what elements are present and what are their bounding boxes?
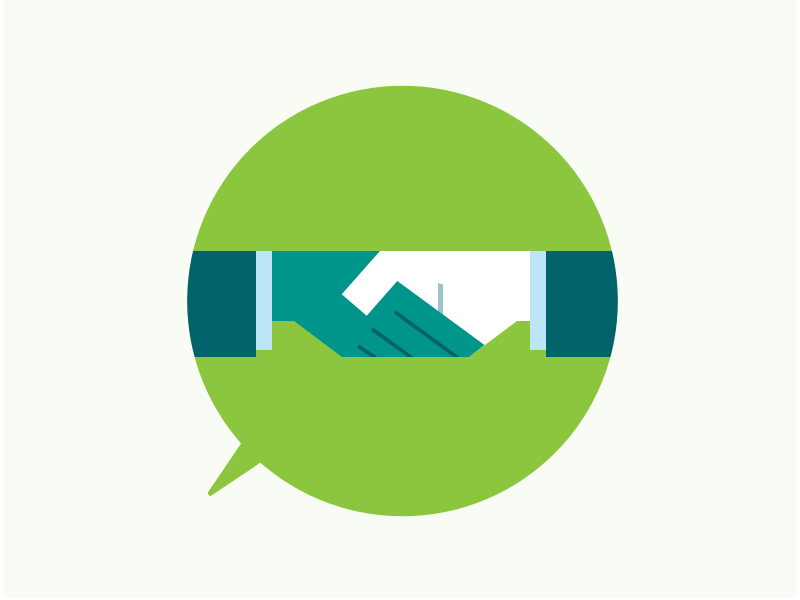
left light shirt cuff bbox=[256, 251, 272, 350]
finger crease bbox=[438, 283, 443, 316]
right dark cuff bbox=[546, 251, 625, 357]
right white hand bbox=[342, 251, 530, 357]
upper finger line bbox=[395, 312, 458, 358]
bubble circle bbox=[187, 86, 618, 516]
teal hand bbox=[366, 281, 484, 357]
bubble tail bbox=[208, 442, 263, 496]
speech bubble bbox=[187, 86, 618, 516]
handshake illustration bbox=[180, 251, 625, 358]
finger lines bbox=[358, 312, 458, 358]
lower finger line bbox=[358, 346, 376, 358]
right light shirt cuff bbox=[530, 251, 546, 350]
left teal sleeve and hand bbox=[272, 251, 380, 357]
left dark cuff bbox=[180, 251, 256, 357]
middle finger line bbox=[372, 329, 412, 358]
